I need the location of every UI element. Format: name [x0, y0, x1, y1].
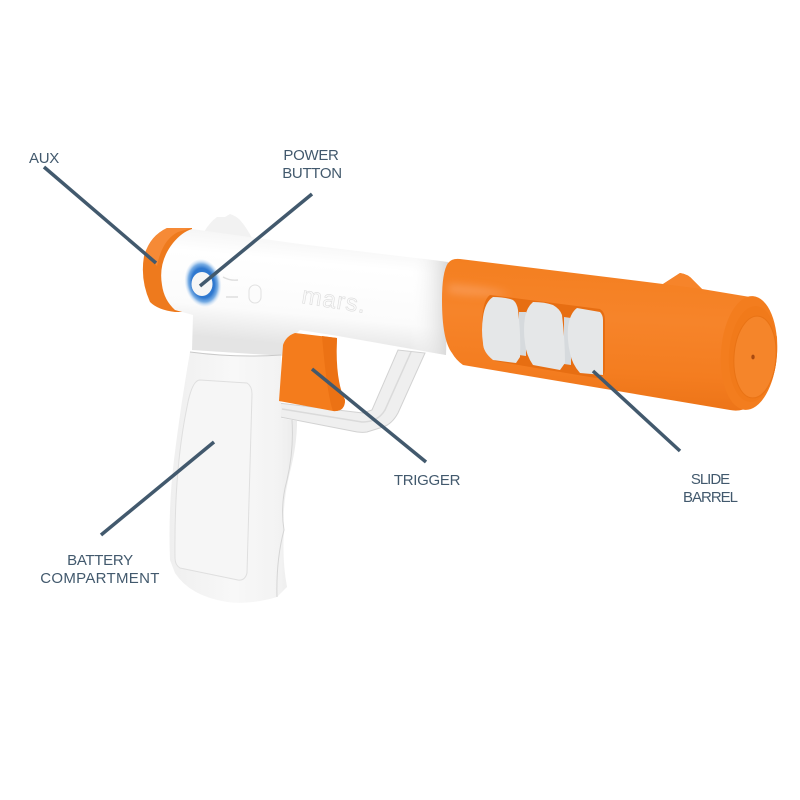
top fin: [204, 214, 253, 240]
trigger guard: [278, 350, 425, 432]
slide barrel window: [482, 295, 605, 378]
leader line: trigger: [312, 369, 426, 462]
barrel fin highlight: [663, 273, 702, 289]
label: aux: AUX: [29, 150, 59, 167]
icon: power button: [180, 256, 226, 310]
grip: [170, 352, 297, 603]
icon: product body: [143, 214, 781, 603]
aux cap: [143, 228, 192, 312]
barrel highlight: [448, 284, 510, 296]
leader line: battery compartment: [101, 442, 214, 535]
main body: [161, 229, 448, 356]
icon: embossed details and logo: [223, 277, 368, 319]
barrel: [442, 259, 781, 412]
body shading near barrel: [410, 257, 448, 355]
label: battery compartment: COMPARTMENT: [40, 570, 160, 587]
leader line: power button: [200, 194, 312, 286]
end cap: [717, 294, 781, 412]
label: battery compartment: BATTERY: [67, 552, 133, 569]
leader line: aux: [44, 167, 156, 263]
battery compartment cover: [175, 380, 252, 580]
label: power button: BUTTON: [282, 165, 342, 182]
label: slide barrel: SLIDE: [691, 471, 730, 488]
trigger: [279, 333, 345, 411]
leader line: slide barrel: [593, 371, 680, 451]
label: slide barrel: BARREL: [683, 489, 738, 506]
label: trigger: TRIGGER: [394, 472, 461, 489]
label: power button: POWER: [283, 147, 339, 164]
icon: embossed details and logo: mars.: [300, 282, 368, 319]
